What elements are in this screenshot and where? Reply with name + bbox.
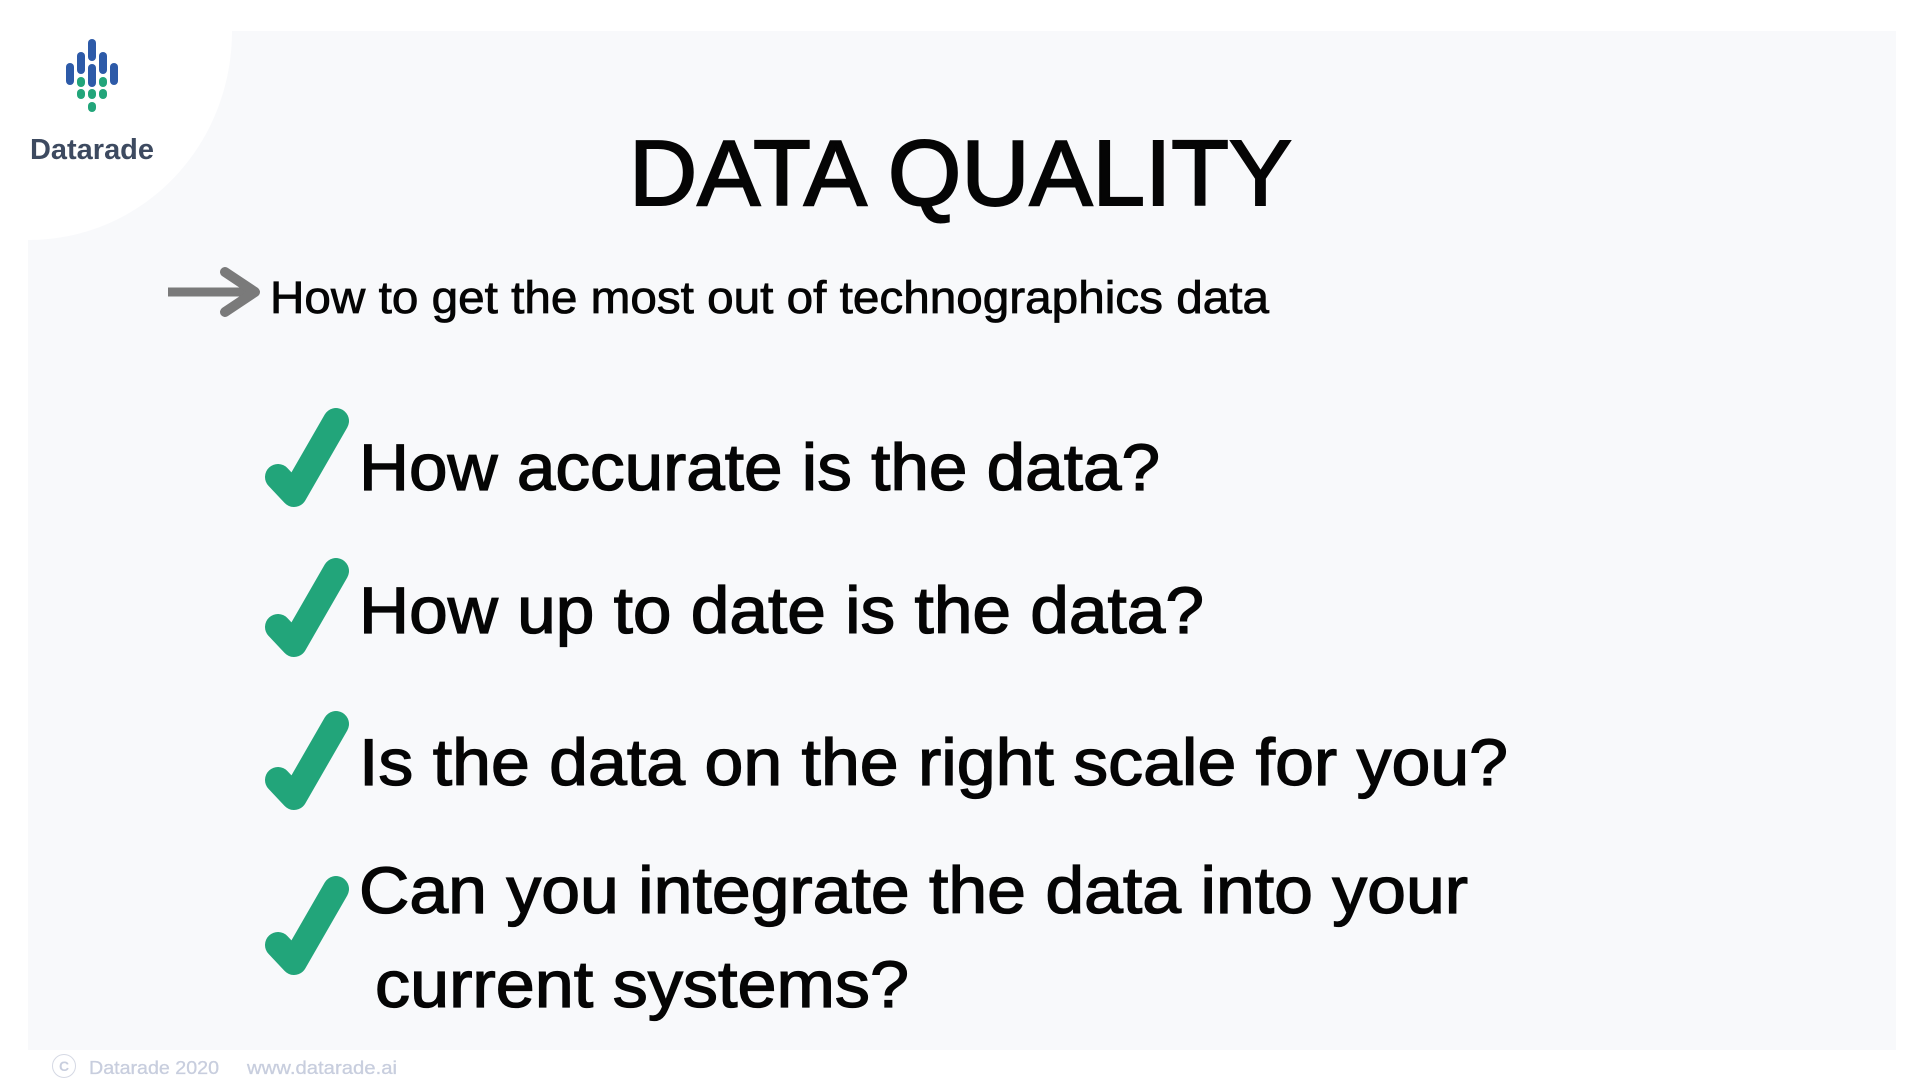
question text: How accurate is the data? xyxy=(359,430,1160,504)
footer: copyright: C xyxy=(59,1058,69,1074)
checklist item 1 xyxy=(278,421,1160,504)
checklist item 4 xyxy=(278,853,1468,1021)
icon: arrow xyxy=(168,272,255,312)
icon: check mark xyxy=(278,724,336,797)
question text: Is the data on the right scale for you? xyxy=(359,725,1508,799)
icon: check mark xyxy=(278,889,336,962)
title: DATA QUALITY xyxy=(629,121,1292,225)
subtitle: How to get the most out of technographics data xyxy=(270,272,1270,323)
question text: current systems? xyxy=(375,947,909,1021)
footer: copyright: www.datarade.ai xyxy=(246,1058,397,1078)
question text xyxy=(359,853,1468,1021)
checklist item 3 xyxy=(278,724,1508,799)
footer: copyright: Datarade 2020 xyxy=(89,1058,219,1078)
icon: check mark xyxy=(278,571,336,644)
logo wordmark: Datarade xyxy=(30,134,154,166)
icon: Datarade logo xyxy=(66,39,118,112)
footer: copyright xyxy=(52,1054,397,1078)
question text: Can you integrate the data into your xyxy=(359,853,1468,927)
checklist item 2 xyxy=(278,571,1204,647)
question text: How up to date is the data? xyxy=(359,573,1204,647)
icon: check mark xyxy=(278,421,336,494)
